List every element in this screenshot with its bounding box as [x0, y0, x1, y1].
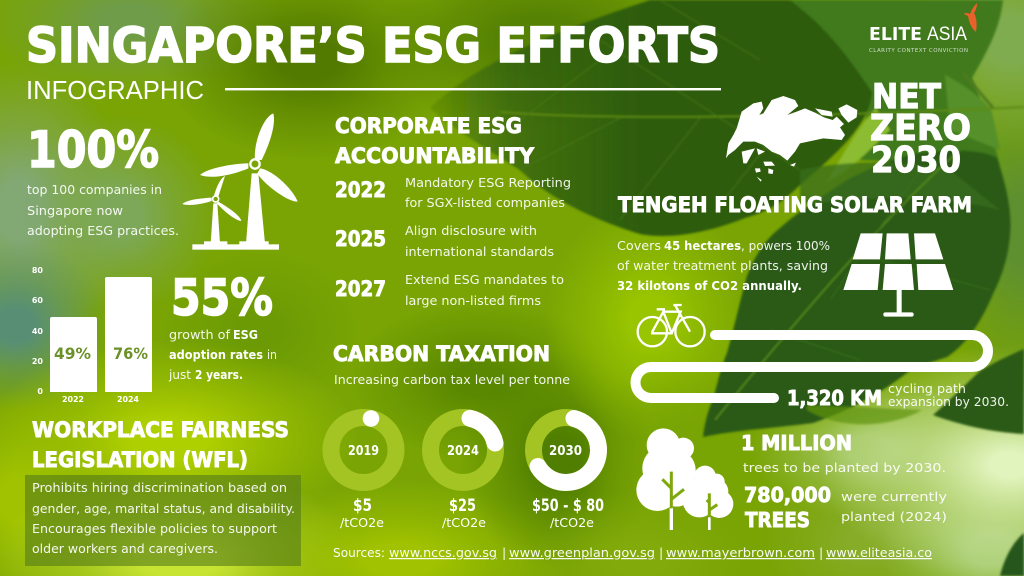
bar label: 2024: 2024	[117, 395, 139, 404]
heading: net zero 2030	[870, 77, 971, 181]
text: cycling description: expansion by 2030.	[888, 394, 1009, 409]
text: growth description: adoption rates	[169, 347, 263, 362]
donut: 2030: /tCO2e	[550, 515, 594, 530]
heading: WORKPLACE FAIRNESS	[32, 418, 289, 442]
bar: 2022	[50, 317, 97, 392]
axis labels: 0	[37, 387, 43, 396]
heading	[335, 114, 535, 168]
text: growth description: in	[267, 347, 277, 362]
text: growth description: growth of	[169, 327, 231, 342]
panel: 55% growth	[168, 269, 277, 382]
heading: net zero 2030: 2030	[871, 140, 961, 181]
logo: Elite Asia	[869, 3, 977, 54]
stat: 1,320 km: 1,320 KM	[787, 386, 882, 410]
timeline: 2022: 2022	[335, 178, 386, 202]
donut: 2019: $5	[353, 496, 372, 516]
sources	[333, 545, 932, 560]
text: solar farm description: 45 hectares	[664, 238, 741, 253]
icon: hummingbird	[964, 3, 977, 32]
text: cycling description: cycling path	[888, 381, 966, 396]
logo: Elite Asia: ASIA	[927, 24, 967, 45]
title rule	[225, 88, 721, 90]
icon: bicycle	[638, 305, 705, 346]
heading: TENGEH FLOATING SOLAR FARM	[618, 193, 972, 217]
timeline: 2025	[335, 223, 554, 259]
text: growth description: ESG	[233, 327, 258, 342]
heading: net zero 2030: ZERO	[870, 108, 971, 149]
timeline: 2027: large non-listed firms	[405, 293, 541, 308]
timeline: 2025: international standards	[405, 244, 554, 259]
donut: 2019: 2019	[348, 444, 379, 459]
stat: 780,000 trees	[744, 483, 831, 532]
panel: 100% adoption	[27, 121, 179, 238]
text: growth description: 2 years.	[195, 367, 243, 382]
axis labels	[32, 266, 43, 396]
bar: 2024	[105, 277, 152, 392]
text: currently planted: were currently	[841, 489, 948, 504]
text: solar farm description: , powers 100%	[741, 238, 830, 253]
donut: 2019: /tCO2e	[340, 515, 384, 530]
donut: 2030: $50 - $ 80	[532, 496, 604, 516]
panel: carbon taxation	[331, 342, 604, 530]
timeline: 2025: Align disclosure with	[405, 223, 537, 238]
timeline: 2022: for SGX-listed companies	[405, 195, 565, 210]
sources: Sources:	[333, 545, 385, 560]
axis labels: 60	[32, 296, 43, 305]
text: currently planted	[841, 489, 948, 524]
text: WFL description	[32, 480, 295, 556]
text: trees target: trees to be planted by 2030.	[743, 460, 946, 475]
sources: www.mayerbrown.com	[666, 545, 815, 560]
timeline: 2022: Mandatory ESG Reporting	[405, 175, 571, 190]
donut: 2019	[331, 410, 396, 530]
bar chart: ESG adoption	[32, 266, 152, 404]
donut: 2024: $25	[449, 496, 476, 516]
text: WFL description: Prohibits hiring discrimination based on	[32, 480, 287, 495]
text: solar farm description: 32 kilotons of CO2 annually.	[617, 278, 802, 293]
icon: trees	[636, 428, 733, 530]
sources: |	[819, 545, 823, 560]
axis labels: 80	[32, 266, 43, 275]
bar label: 2022: 2022	[62, 395, 84, 404]
stat: 55%: 55%	[171, 269, 273, 327]
donut: 2030	[532, 418, 604, 530]
timeline: 2022	[335, 175, 571, 210]
map: Singapore	[726, 96, 857, 182]
sources: |	[659, 545, 663, 560]
panel: trees	[636, 428, 948, 532]
donut: 2030: 2030	[549, 444, 582, 459]
heading: LEGISLATION (WFL)	[32, 448, 248, 472]
stat: 780,000 trees: 780,000	[744, 483, 831, 507]
heading: CARBON TAXATION	[333, 342, 550, 366]
donut: 2024: /tCO2e	[442, 515, 486, 530]
panel: Tengeh floating solar farm	[617, 193, 972, 317]
axis labels: 20	[32, 357, 43, 366]
logo: Elite Asia: CLARITY CONTEXT CONVICTION	[869, 48, 968, 54]
text: solar farm description: of water treatment plants, saving	[617, 258, 828, 273]
axis labels: 40	[32, 327, 43, 336]
background: leaves	[430, 0, 1024, 576]
timeline: 2025: 2025	[335, 227, 386, 251]
heading	[32, 418, 289, 472]
heading: 1 million: 1 MILLION	[741, 431, 852, 455]
timeline: 2027: Extend ESG mandates to	[405, 272, 564, 287]
sources: www.eliteasia.co	[826, 545, 932, 560]
winding path	[636, 335, 988, 398]
sources: www.nccs.gov.sg	[389, 545, 497, 560]
timeline: 2027	[335, 272, 564, 308]
timeline: 2027: 2027	[335, 277, 386, 301]
callout box	[25, 475, 301, 566]
bar value: 49%: 49%	[54, 344, 91, 363]
subheading: Increasing carbon tax level per tonne	[334, 372, 570, 387]
heading: ACCOUNTABILITY	[335, 144, 535, 168]
text: adoption description: adopting ESG practices.	[27, 223, 179, 238]
panel: workplace fairness legislation	[25, 418, 301, 566]
text: WFL description: Encourages flexible policies to support	[32, 521, 277, 536]
text: solar farm description	[617, 238, 830, 293]
text: WFL description: older workers and caregivers.	[32, 541, 218, 556]
heading: CORPORATE ESG	[335, 114, 522, 138]
bar value: 76%: 76%	[113, 344, 148, 363]
title: SINGAPORE’S ESG EFFORTS	[26, 18, 720, 74]
logo: Elite Asia: ELITE	[869, 24, 922, 45]
subtitle: INFOGRAPHIC	[26, 75, 204, 105]
stat: 780,000 trees: TREES	[745, 508, 810, 532]
icon: wind turbines	[182, 113, 298, 250]
sources: |	[502, 545, 506, 560]
donut: 2024: 2024	[447, 444, 479, 459]
sources: www.greenplan.gov.sg	[509, 545, 655, 560]
text: currently planted: planted (2024)	[841, 509, 947, 524]
text: cycling description	[888, 381, 1009, 409]
donut: 2024	[430, 418, 496, 530]
text: growth description	[168, 327, 277, 382]
text: WFL description: gender, age, marital status, and disability.	[32, 501, 295, 516]
icon: solar panel	[843, 233, 953, 317]
text: adoption description: top 100 companies in	[27, 182, 162, 197]
heading: net zero 2030: NET	[872, 77, 942, 117]
panel: cycling path	[636, 305, 1009, 410]
text: solar farm description: Covers	[617, 238, 661, 253]
panel: corporate ESG accountability	[335, 114, 571, 308]
text: adoption description: Singapore now	[27, 203, 123, 218]
text: growth description: just	[168, 367, 191, 382]
stat: 100%: 100%	[27, 121, 159, 179]
text: adoption description	[27, 182, 179, 238]
